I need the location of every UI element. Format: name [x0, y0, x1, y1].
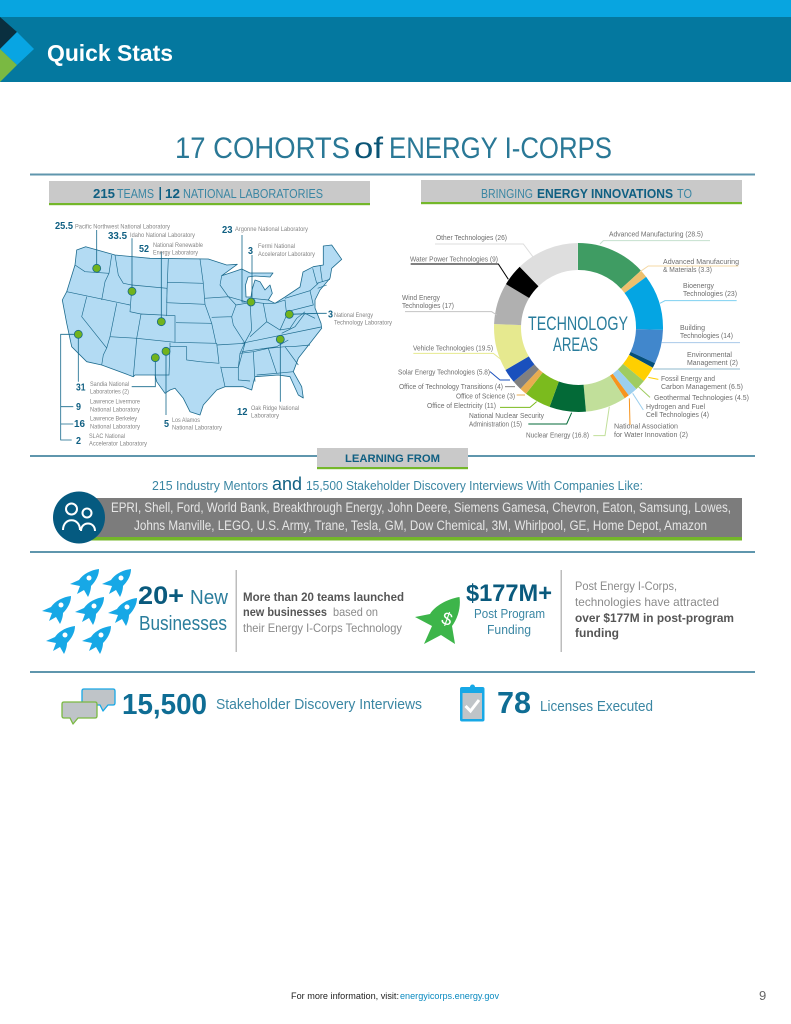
map labels: laboratory team counts: National Renewable — [153, 243, 204, 249]
map labels: laboratory team counts: SLAC National — [89, 434, 125, 440]
header banner — [0, 0, 791, 82]
donut labels: National Nuclear Security — [469, 413, 544, 420]
map labels: laboratory team counts: Laboratories (2) — [90, 390, 129, 396]
footer link — [291, 991, 500, 1001]
map labels: laboratory team counts: Accelerator Laboratory — [258, 252, 315, 258]
mentors and interviews sentence: 15,500 Stakeholder Discovery Interviews With Companies Like: — [306, 478, 643, 493]
donut center label — [528, 314, 628, 356]
map labels: laboratory team counts: Energy Laboratory — [153, 250, 198, 256]
donut leader lines — [405, 241, 740, 436]
map labels: laboratory team counts: Oak Ridge National — [251, 406, 299, 412]
map labels: laboratory team counts: Argonne National Laboratory — [235, 227, 308, 233]
donut center label: AREAS — [553, 335, 598, 356]
stat: new businesses: 20+ — [138, 582, 184, 610]
companies banner — [80, 498, 742, 540]
heading: teams and laboratories: 12 — [165, 186, 180, 201]
donut labels: Office of Science (3) — [456, 394, 515, 400]
donut labels: Office of Electricity (11) — [427, 403, 496, 410]
main title: 17 COHORTS — [175, 132, 350, 165]
US outline — [62, 245, 342, 415]
map labels: laboratory team counts: 3 — [328, 310, 333, 320]
donut labels: Advanced Manufacuring — [663, 259, 739, 266]
donut labels: Vehicle Technologies (19.5) — [413, 346, 493, 352]
donut labels: Office of Technology Transitions (4) — [399, 384, 503, 391]
map labels: laboratory team counts: Laboratory — [251, 414, 279, 420]
icon: funding rocket — [415, 597, 460, 644]
map labels: laboratory team counts: 25.5 — [55, 221, 73, 232]
text: new businesses description: based on — [333, 605, 378, 619]
stat: new businesses — [138, 582, 229, 635]
stat: stakeholder interviews: 15,500 — [122, 689, 207, 721]
stat: post program funding — [466, 580, 552, 637]
text: new businesses description: new businesses — [243, 605, 327, 619]
donut labels: Nuclear Energy (16.8) — [526, 432, 589, 440]
footer link: For more information, visit: — [291, 991, 399, 1001]
donut labels: Hydrogen and Fuel — [646, 404, 705, 411]
stat: licenses executed: Licenses Executed — [540, 698, 653, 715]
heading: teams and laboratories: NATIONAL LABORATORIES — [183, 186, 323, 201]
map labels: laboratory team counts: Los Alamos — [172, 418, 200, 424]
map labels: laboratory team counts: 16 — [74, 419, 85, 430]
map labels: laboratory team counts: National Laboratory — [90, 424, 140, 430]
donut labels: Technologies (23) — [683, 291, 737, 298]
heading: bringing energy innovations: TO — [677, 186, 692, 201]
heading: teams and laboratories: 215 — [93, 186, 115, 201]
stat: post program funding: Funding — [487, 622, 531, 637]
heading: bringing energy innovations: ENERGY INNOVATIONS — [537, 186, 673, 201]
donut labels: Cell Technologies (4) — [646, 412, 709, 419]
donut chart: technology areas — [508, 256, 650, 398]
donut labels: Fossil Energy and — [661, 376, 715, 383]
donut labels: Advanced Manufacturing (28.5) — [609, 232, 703, 238]
stat: licenses executed — [497, 685, 653, 720]
mentors and interviews sentence: 215 Industry Mentors — [152, 478, 268, 493]
laboratory markers — [74, 264, 293, 362]
map labels: laboratory team counts: 5 — [164, 419, 169, 430]
donut labels: & Materials (3.3) — [663, 267, 712, 274]
map labels: laboratory team counts: Technology Laboratory — [334, 320, 392, 326]
map labels: laboratory team counts: 23 — [222, 225, 233, 236]
icon: rockets — [42, 569, 137, 654]
heading: teams and laboratories — [49, 181, 370, 205]
donut labels: Water Power Technologies (9) — [410, 256, 498, 264]
map labels: laboratory team counts: Lawrence Berkeley — [90, 416, 137, 422]
map labels: laboratory team counts: National Laboratory — [90, 408, 140, 414]
map: national laboratories — [61, 230, 342, 440]
text: new businesses description: their Energy I-Corps Technology — [243, 621, 402, 635]
donut labels: for Water Innovation (2) — [614, 432, 688, 439]
text: new businesses description: More than 20 teams launched — [243, 590, 404, 604]
text: funding description: technologies have attracted — [575, 595, 719, 609]
map labels: laboratory team counts: Sandia National — [90, 382, 129, 388]
text: funding description: over $177M in post-program — [575, 611, 734, 625]
map labels: laboratory team counts: 2 — [76, 436, 81, 447]
donut center label: TECHNOLOGY — [528, 314, 628, 335]
heading: teams and laboratories: TEAMS — [117, 186, 154, 201]
donut labels: Technologies (14) — [680, 333, 733, 340]
state borders — [67, 255, 330, 387]
mentors and interviews sentence — [152, 474, 643, 494]
icon: clipboard — [460, 685, 484, 722]
stat: new businesses: Businesses — [139, 613, 227, 635]
stat: post program funding: Post Program — [474, 606, 545, 621]
donut labels: Carbon Management (6.5) — [661, 384, 743, 391]
donut labels: National Association — [614, 424, 678, 430]
donut labels: Environmental — [687, 352, 732, 359]
donut labels: Technologies (17) — [402, 303, 454, 310]
mentors and interviews sentence: and — [272, 474, 302, 494]
text: funding description: Post Energy I-Corps, — [575, 579, 677, 593]
donut labels: Management (2) — [687, 360, 738, 367]
icon: funding rocket: $ — [439, 608, 455, 630]
leader lines — [61, 230, 327, 440]
heading: bringing energy innovations: BRINGING — [481, 186, 533, 201]
map labels: laboratory team counts — [55, 221, 392, 448]
stat: new businesses: New — [190, 587, 229, 609]
footer link: energyicorps.energy.gov — [400, 991, 500, 1001]
map labels: laboratory team counts: Pacific Northwest National Laboratory — [75, 224, 170, 230]
donut labels: Building — [680, 325, 705, 332]
donut labels: Other Technologies (26) — [436, 235, 507, 242]
text: funding description — [575, 579, 734, 640]
map labels: laboratory team counts: Idaho National Laboratory — [130, 233, 195, 239]
companies banner: Johns Manville, LEGO, U.S. Army, Trane, Tesla, GM, Dow Chemical, 3M, Whirlpool, GE, Home Depot, Amazon — [134, 518, 707, 533]
map labels: laboratory team counts: 52 — [139, 244, 149, 255]
text: new businesses description — [243, 590, 404, 635]
donut labels: Bioenergy — [683, 283, 714, 290]
map labels: laboratory team counts: 12 — [237, 407, 248, 418]
donut labels: Administration (15) — [469, 422, 522, 428]
stat: stakeholder interviews — [122, 689, 422, 721]
map labels: laboratory team counts: 31 — [76, 382, 86, 394]
main title: of — [354, 132, 384, 165]
stat: post program funding: $177M+ — [466, 580, 552, 607]
map labels: laboratory team counts: 9 — [76, 402, 81, 413]
heading: bringing energy innovations — [421, 180, 742, 204]
map labels: laboratory team counts: National Laboratory — [172, 426, 222, 432]
map labels: laboratory team counts: Lawrence Livermore — [90, 400, 141, 406]
main title: ENERGY I-CORPS — [389, 132, 612, 165]
header banner: Quick Stats — [47, 40, 173, 66]
stat: stakeholder interviews: Stakeholder Discovery Interviews — [216, 696, 422, 713]
page number: 9 — [759, 988, 766, 1003]
main title — [175, 132, 612, 165]
map labels: laboratory team counts: 33.5 — [108, 231, 127, 242]
heading: learning from: LEARNING FROM — [345, 453, 440, 465]
stat: licenses executed: 78 — [497, 685, 531, 720]
icon: people — [53, 492, 105, 544]
heading: learning from — [317, 448, 468, 469]
map labels: laboratory team counts: 3 — [248, 246, 253, 257]
icon: chat bubbles — [62, 689, 115, 724]
map labels: laboratory team counts: Fermi National — [258, 244, 295, 250]
donut labels: Wind Energy — [402, 295, 440, 302]
map labels: laboratory team counts: National Energy — [334, 313, 373, 319]
map labels: laboratory team counts: Accelerator Laboratory — [89, 442, 147, 448]
donut labels: Solar Energy Technologies (5.8) — [398, 370, 490, 376]
text: funding description: funding — [575, 626, 619, 640]
donut labels: Geothermal Technologies (4.5) — [654, 395, 749, 402]
donut labels — [398, 232, 749, 440]
